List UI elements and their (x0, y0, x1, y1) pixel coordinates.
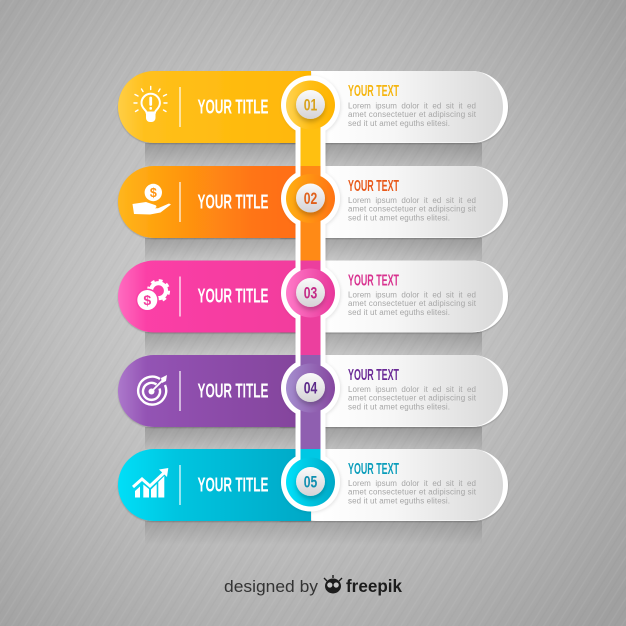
node 02: 02 (304, 190, 317, 208)
node 01 (286, 80, 335, 130)
node 05: 05 (304, 474, 317, 492)
text block: row 5 (348, 461, 477, 505)
text block: row 1: YOUR TEXT (348, 83, 399, 100)
icon: gear and coin: $ (143, 292, 151, 308)
text block: row 3: Lorem ipsum dolor it ed sit it ed (348, 290, 476, 300)
panel: row 2 orange pill (118, 166, 300, 238)
text block: row 2 (348, 178, 477, 222)
icon: growth chart (133, 468, 168, 498)
title: row 3: YOUR TITLE (198, 286, 268, 308)
icon: hand holding coin: $ (150, 186, 157, 200)
text block: row 5: YOUR TEXT (348, 461, 399, 478)
text block: row 4: sed it ut amet eguths elitesi. (348, 402, 450, 411)
text block: row 5: sed it ut amet eguths elitesi. (348, 496, 450, 505)
text block: row 3 (348, 272, 477, 317)
text block: row 1: sed it ut amet eguths elitesi. (348, 119, 450, 128)
freepik credit: designed by (224, 578, 319, 596)
node 05 (286, 458, 335, 506)
freepik credit: freepik (346, 576, 402, 596)
text block: row 1: Lorem ipsum dolor it ed sit it ed (348, 102, 476, 110)
text block: row 2: amet consectetuer et adipiscing sit (348, 205, 477, 214)
text block: row 1 (348, 83, 477, 128)
panel: row 2 text card (280, 166, 508, 238)
icon: target with arrow (138, 375, 167, 405)
backing shadow column (145, 143, 482, 545)
text block: row 4: amet consectetuer et adipiscing sit (348, 394, 477, 403)
node 02 (286, 174, 335, 223)
text block: row 2: sed it ut amet eguths elitesi. (348, 213, 450, 222)
timeline white casing (281, 76, 340, 512)
divider lines (179, 87, 181, 505)
node 04: 04 (304, 380, 318, 398)
panel: row 1 yellow pill (118, 71, 311, 143)
panel: row 4 purple pill (118, 355, 300, 427)
text block: row 3: sed it ut amet eguths elitesi. (348, 308, 450, 317)
text block: row 4: YOUR TEXT (348, 367, 399, 384)
title: row 5: YOUR TITLE (198, 474, 268, 496)
text block: row 5: Lorem ipsum dolor it ed sit it ed (348, 479, 476, 488)
node 03: 03 (304, 284, 317, 302)
text block: row 4 (348, 367, 477, 411)
freepik credit (224, 575, 402, 596)
node 04 (286, 364, 335, 412)
title: row 4: YOUR TITLE (198, 380, 268, 402)
panel: row 1 text card (280, 71, 508, 143)
text block: row 4: Lorem ipsum dolor it ed sit it ed (348, 385, 476, 394)
text block: row 2: YOUR TEXT (348, 178, 399, 195)
text block: row 1: amet consectetuer et adipiscing sit (348, 110, 477, 119)
text block: row 3: YOUR TEXT (348, 272, 399, 290)
panel: row 3 text card (280, 260, 508, 332)
panel: row 4 text card (280, 355, 508, 427)
text block: row 3: amet consectetuer et adipiscing sit (348, 299, 477, 308)
node 03 (286, 268, 335, 318)
icon: freepik mascot (324, 575, 342, 594)
icon: light bulb (134, 86, 167, 122)
timeline bar segments (300, 105, 320, 482)
text block: row 2: Lorem ipsum dolor it ed sit it ed (348, 196, 476, 205)
panel: row 3 pink pill (118, 260, 300, 332)
text block: row 5: amet consectetuer et adipiscing sit (348, 488, 477, 497)
panel: row 5 blue pill (118, 449, 311, 521)
node 01: 01 (304, 96, 317, 114)
title: row 1: YOUR TITLE (198, 96, 268, 118)
icon: gear and coin (136, 280, 169, 312)
icon: hand holding coin (132, 184, 171, 214)
title: row 2: YOUR TITLE (198, 192, 268, 214)
panel: row 5 text card (280, 449, 508, 521)
